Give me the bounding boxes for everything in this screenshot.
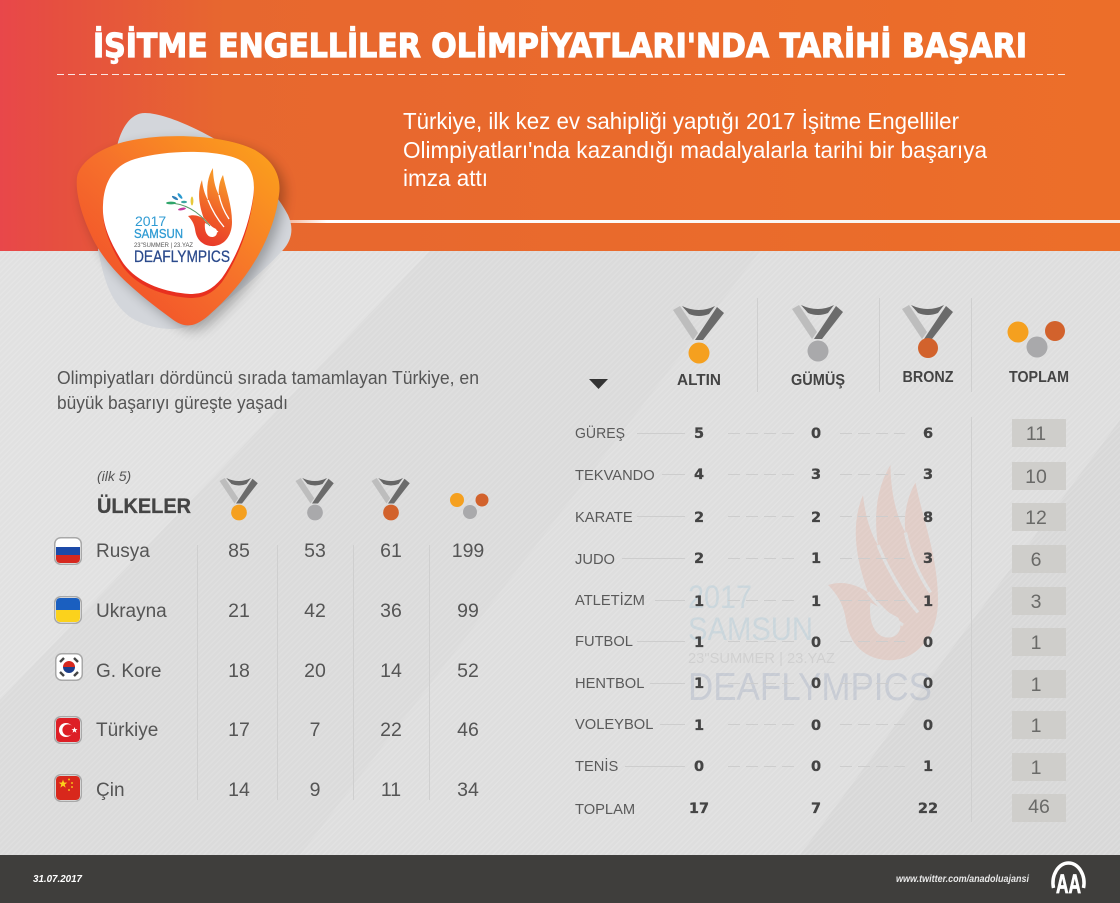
row: FUTBOL: 0 — [923, 635, 933, 651]
deaflympics logo — [77, 113, 291, 330]
row: VOLEYBOL: 0 — [923, 718, 933, 734]
row: Rusya: Rusya — [96, 541, 150, 562]
left table heading: (ilk 5) — [97, 468, 131, 484]
icon: Ukraine flag — [55, 597, 81, 623]
logo wordmark — [134, 213, 230, 266]
row: HENTBOL — [575, 670, 1066, 698]
row: Rusya: 85 — [228, 540, 250, 562]
row: Türkiye: 7 — [310, 719, 320, 741]
row: Çin: 11 — [381, 779, 401, 801]
row: VOLEYBOL: 0 — [811, 718, 821, 734]
row: Ukrayna: 42 — [304, 600, 326, 622]
column dividers — [198, 545, 430, 800]
row: JUDO: 2 — [694, 551, 704, 567]
row: Çin: 14 — [228, 779, 250, 801]
row: FUTBOL: 0 — [811, 635, 821, 651]
header band — [0, 0, 1120, 251]
icon: Anadolu Agency logo — [1053, 863, 1084, 899]
row: ATLETİZM — [575, 587, 1066, 615]
row: VOLEYBOL: 1 — [694, 718, 704, 734]
row: TEKVANDO: 10 — [1025, 466, 1047, 488]
row: FUTBOL: 1 — [1031, 632, 1041, 654]
row: ATLETİZM: ATLETİZM — [575, 591, 645, 609]
row: JUDO: 6 — [1031, 549, 1041, 571]
row: TEKVANDO: 3 — [923, 467, 933, 483]
icon: China flag — [55, 775, 81, 801]
header dividers — [758, 298, 972, 822]
logo wordmark: 2017 — [135, 213, 166, 229]
icon: silver medal — [792, 305, 843, 362]
row: VOLEYBOL — [575, 711, 1066, 739]
row: Ukrayna: 99 — [457, 600, 479, 622]
row: KARATE: 2 — [811, 510, 821, 526]
row: FUTBOL: FUTBOL — [575, 634, 633, 650]
column: ALTIN — [673, 306, 724, 389]
logo red rim — [103, 154, 254, 298]
row: G. Kore: G. Kore — [96, 661, 161, 682]
watermark logo: DEAFLYMPICS — [688, 666, 932, 709]
row: Ukrayna — [55, 597, 479, 623]
row: Türkiye: Türkiye — [96, 720, 158, 741]
icon: small total medals — [450, 493, 488, 519]
row: G. Kore: 18 — [228, 660, 250, 682]
logo flame — [188, 168, 232, 246]
column: TOPLAM: TOPLAM — [1009, 369, 1069, 386]
row: JUDO: JUDO — [575, 552, 615, 568]
logo wordmark: 23"SUMMER | 23.YAZ — [134, 242, 193, 249]
row: GÜREŞ: 5 — [694, 426, 704, 442]
left table heading — [97, 468, 191, 518]
row: TEKVANDO: 3 — [811, 467, 821, 483]
row: HENTBOL: 0 — [923, 676, 933, 692]
column: ALTIN: ALTIN — [677, 372, 721, 389]
icon: bronze medal — [902, 305, 953, 358]
row: Türkiye: 46 — [457, 719, 479, 741]
row: TENİS: 0 — [694, 759, 704, 775]
left intro text — [57, 368, 479, 413]
logo wordmark: DEAFLYMPICS — [134, 247, 230, 266]
row: ATLETİZM: 1 — [694, 594, 704, 610]
row: TOPLAM: TOPLAM — [575, 802, 635, 818]
row: G. Kore — [56, 654, 479, 682]
row: GÜREŞ: 0 — [811, 426, 821, 442]
row: Rusya: 53 — [304, 540, 326, 562]
row: FUTBOL — [575, 628, 1066, 656]
watermark logo: 23"SUMMER | 23.YAZ — [688, 650, 835, 667]
row: ATLETİZM: 1 — [811, 594, 821, 610]
row: Rusya: 199 — [452, 540, 484, 562]
logo olive branch — [166, 192, 210, 226]
row: KARATE — [575, 503, 1066, 531]
row: JUDO: 1 — [811, 551, 821, 567]
row: ATLETİZM: 3 — [1031, 591, 1041, 613]
row: HENTBOL: 1 — [694, 676, 704, 692]
sort marker arrow — [589, 379, 608, 389]
left table: countries — [55, 468, 488, 801]
left intro text: büyük başarıyı güreşte yaşadı — [57, 393, 288, 413]
row: HENTBOL: HENTBOL — [575, 676, 644, 692]
icon: Turkey flag — [55, 717, 81, 743]
watermark logo — [688, 465, 938, 709]
left intro text: Olimpiyatları dördüncü sırada tamamlayan Türkiye, en — [57, 368, 479, 388]
footer bar — [0, 855, 1120, 903]
row: JUDO — [575, 545, 1066, 573]
icon: South Korea flag — [56, 654, 82, 680]
row: TOPLAM: 22 — [918, 801, 938, 817]
row: TENİS — [575, 753, 1066, 781]
row: GÜREŞ: 11 — [1026, 423, 1046, 445]
title: İŞİTME ENGELLİLER OLİMPİYATLARI'NDA TARİHİ BAŞARI — [93, 25, 1027, 65]
header intro text — [403, 108, 987, 191]
row: JUDO: 3 — [923, 551, 933, 567]
row: TOPLAM: 46 — [1028, 796, 1050, 818]
row: G. Kore: 14 — [380, 660, 402, 682]
row: Çin — [55, 775, 479, 801]
logo white panel — [103, 152, 254, 294]
row: TOPLAM: 7 — [811, 801, 821, 817]
row: Ukrayna: Ukrayna — [96, 601, 167, 622]
column: TOPLAM — [1008, 321, 1069, 386]
column: BRONZ — [902, 305, 954, 386]
row: TEKVANDO — [575, 462, 1066, 490]
row: KARATE: 12 — [1025, 507, 1047, 529]
row: TEKVANDO: TEKVANDO — [575, 468, 655, 484]
column: GÜMÜŞ: GÜMÜŞ — [791, 370, 845, 389]
row: KARATE: 2 — [694, 510, 704, 526]
row: Türkiye — [55, 717, 479, 743]
row: Ukrayna: 36 — [380, 600, 402, 622]
row: Rusya — [55, 538, 484, 564]
row: G. Kore: 52 — [457, 660, 479, 682]
logo shadow — [82, 141, 285, 330]
row: VOLEYBOL: VOLEYBOL — [575, 717, 653, 733]
icon: small silver medal — [296, 478, 334, 520]
icon: gold medal — [673, 306, 724, 364]
row: FUTBOL: 1 — [694, 635, 704, 651]
row: GÜREŞ — [575, 419, 1066, 447]
icon: Anadolu Agency logo: AA — [1056, 869, 1081, 899]
row: TEKVANDO: 4 — [694, 467, 704, 483]
title dashed rule — [57, 74, 1065, 76]
row: KARATE: KARATE — [575, 510, 633, 526]
twitter url: www.twitter.com/anadoluajansi — [896, 874, 1029, 885]
row: TENİS: TENİS — [575, 757, 618, 775]
column: BRONZ: BRONZ — [902, 369, 954, 386]
row: HENTBOL: 1 — [1031, 674, 1041, 696]
column: GÜMÜŞ — [791, 305, 845, 389]
row: GÜREŞ: 6 — [923, 426, 933, 442]
row: Çin: Çin — [96, 780, 125, 801]
watermark logo: 2017 — [688, 579, 752, 615]
logo wordmark: SAMSUN — [134, 226, 183, 241]
row: VOLEYBOL: 1 — [1031, 715, 1041, 737]
row: HENTBOL: 0 — [811, 676, 821, 692]
row: TENİS: 0 — [811, 759, 821, 775]
row: Çin: 34 — [457, 779, 479, 801]
left table heading: ÜLKELER — [97, 495, 191, 518]
row: TENİS: 1 — [923, 759, 933, 775]
row: GÜREŞ: GÜREŞ — [575, 424, 625, 442]
icon: Russia flag — [55, 538, 81, 564]
watermark logo: SAMSUN — [688, 611, 813, 647]
row: TOPLAM: 17 — [689, 801, 709, 817]
row: Rusya: 61 — [380, 540, 402, 562]
icon: small gold medal — [220, 478, 258, 520]
row: TOPLAM — [575, 794, 1066, 822]
row: KARATE: 8 — [923, 510, 933, 526]
row: TENİS: 1 — [1031, 757, 1041, 779]
logo orange shape — [77, 136, 280, 325]
header intro text: Türkiye, ilk kez ev sahipliği yaptığı 2017 İşitme Engelliler — [403, 108, 959, 134]
row: ATLETİZM: 1 — [923, 594, 933, 610]
right table: branches — [575, 298, 1069, 822]
row: Çin: 9 — [310, 779, 320, 801]
icon: small bronze medal — [372, 478, 410, 520]
date: 31.07.2017 — [33, 874, 82, 885]
row: Türkiye: 22 — [380, 719, 402, 741]
header intro text: Olimpiyatları'nda kazandığı madalyalarla tarihi bir başarıya — [403, 137, 987, 163]
row: G. Kore: 20 — [304, 660, 326, 682]
icon: total medals — [1008, 321, 1065, 358]
row: Ukrayna: 21 — [228, 600, 250, 622]
header intro text: imza attı — [403, 165, 488, 191]
row: Türkiye: 17 — [228, 719, 250, 741]
logo back shape — [98, 113, 291, 329]
